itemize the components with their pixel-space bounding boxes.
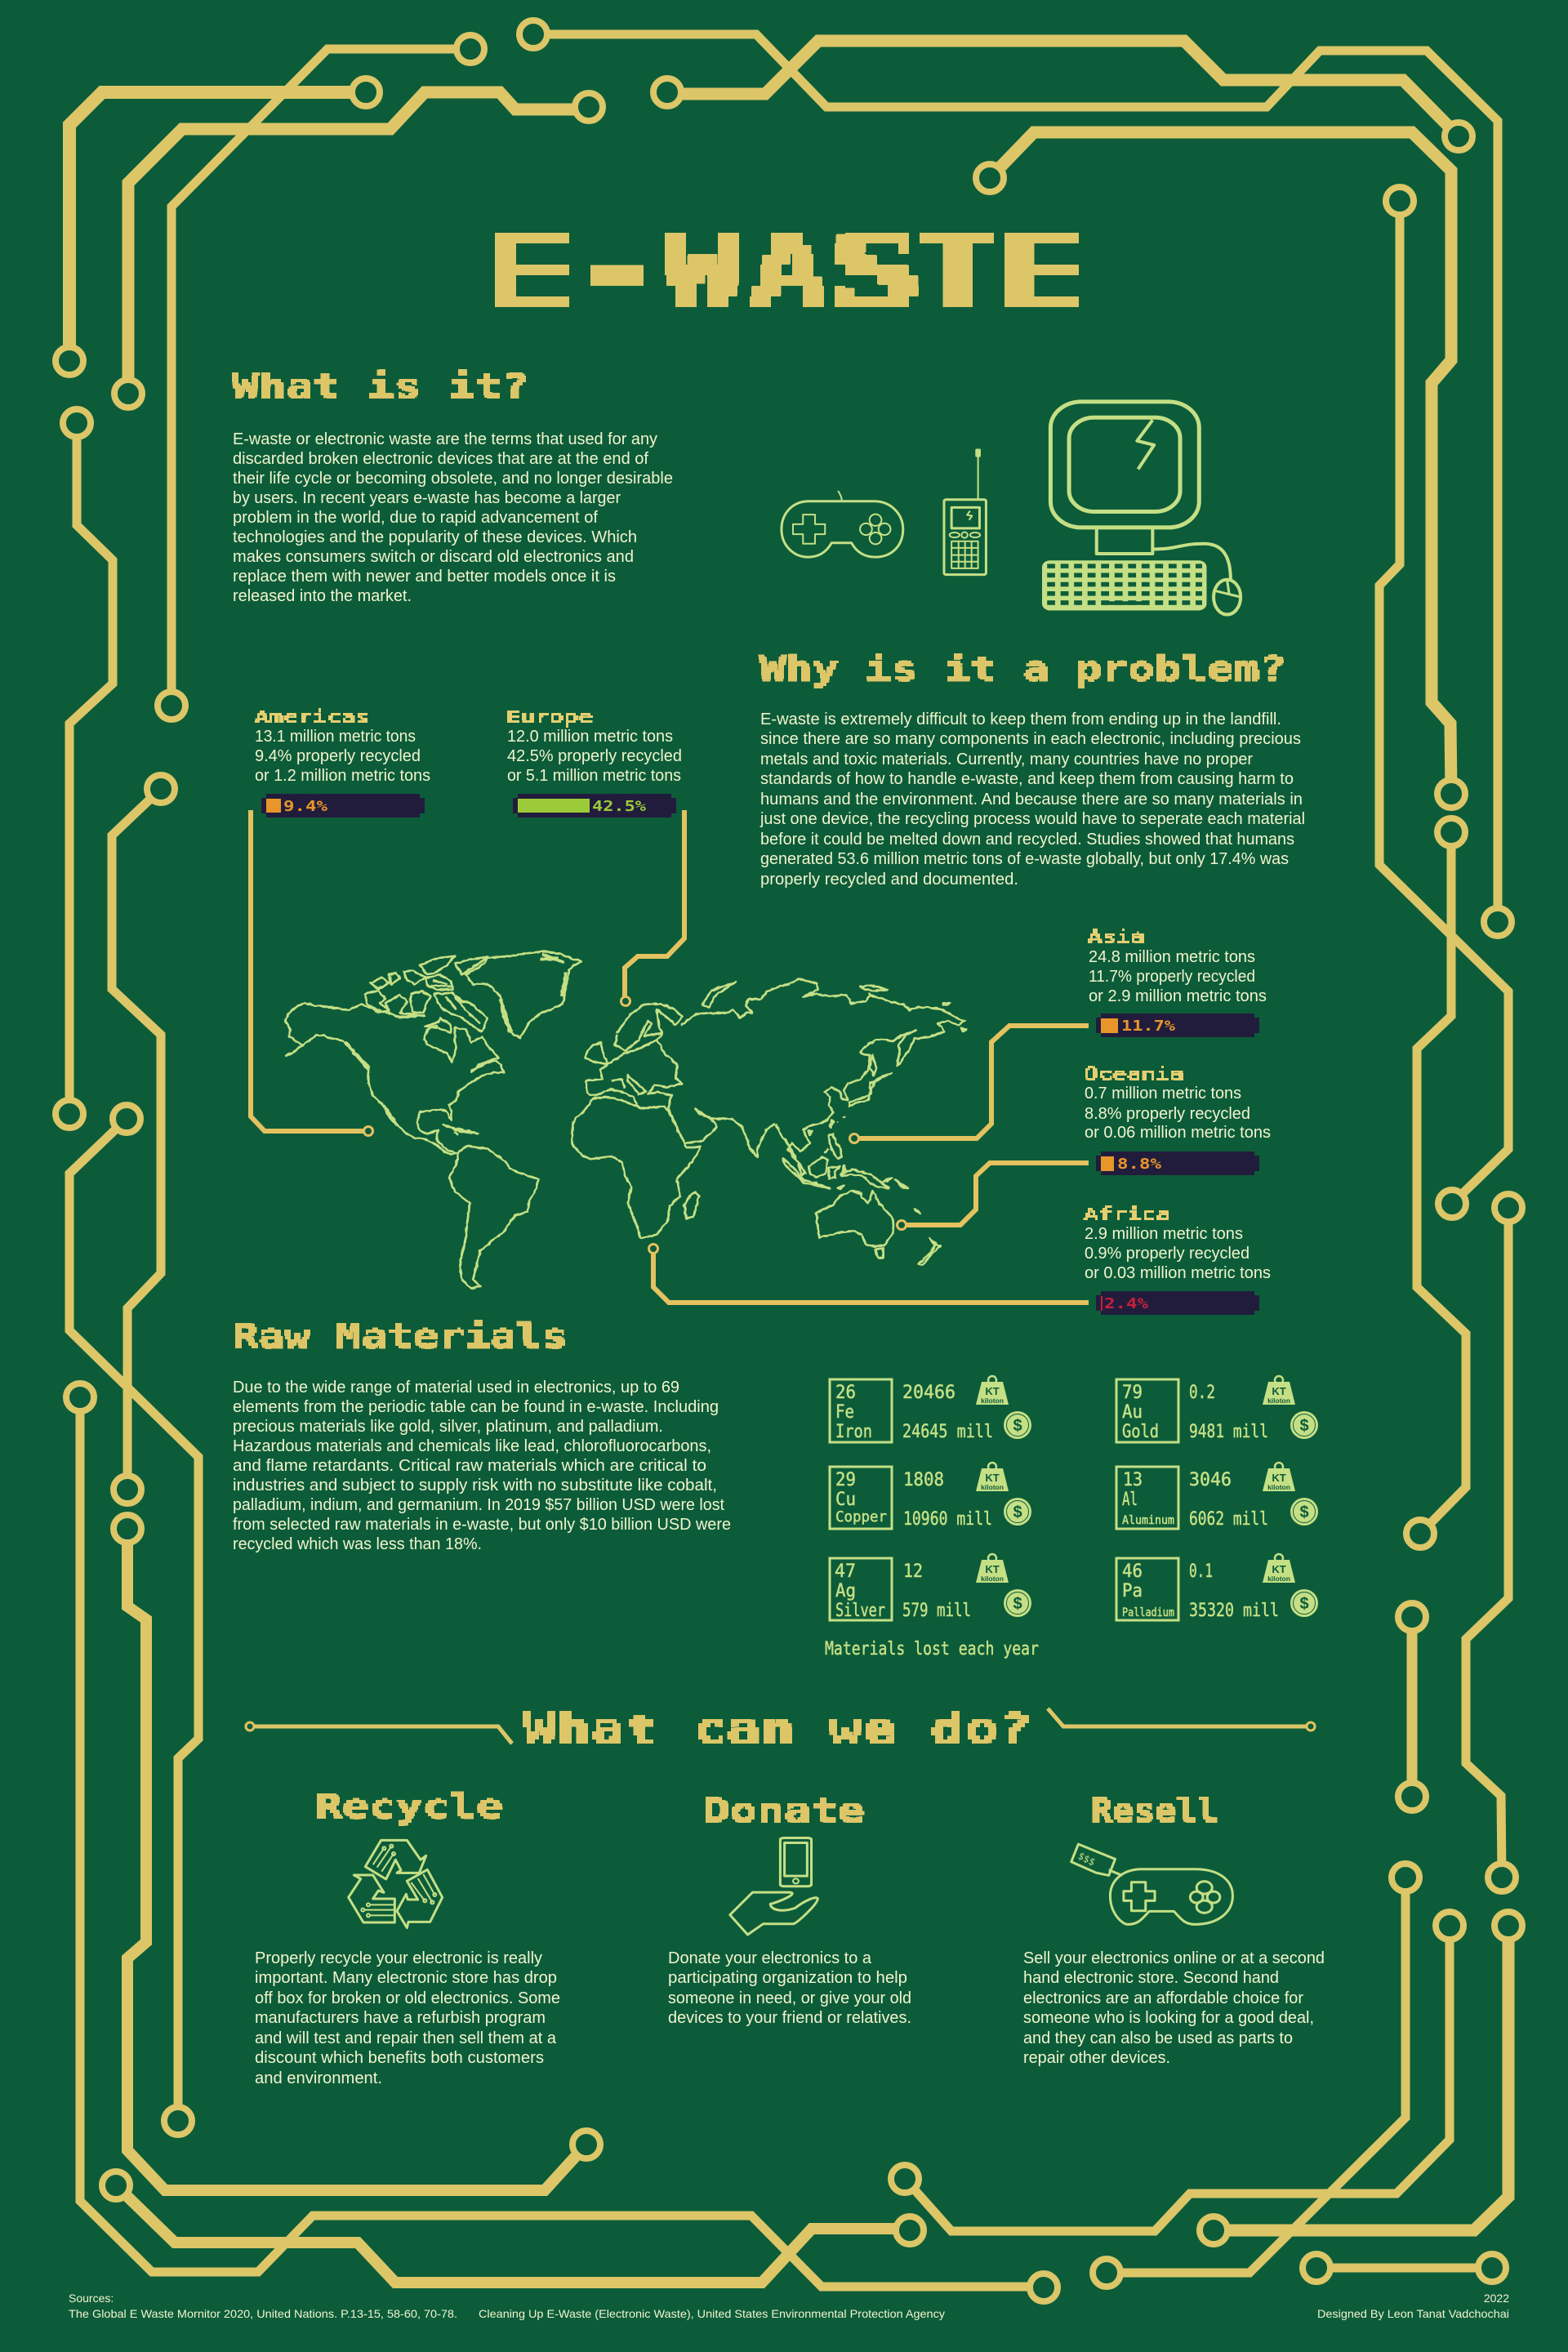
material: copper: KT (985, 1472, 1000, 1484)
text block: what is it: by users. In recent years e-waste has become a larger (233, 489, 621, 507)
callout: Oceania (897, 1064, 1271, 1230)
callout: Europe: or 5.1 million metric tons (507, 767, 681, 785)
text block: resell: repair other devices. (1023, 2049, 1170, 2067)
material: silver: KT (985, 1563, 1000, 1575)
material: iron (830, 1376, 1031, 1442)
text block: what is it: their life cycle or becoming obsolete, and no longer desirable (233, 470, 673, 488)
callout: Europe (506, 707, 684, 1006)
material: palladium: Pa (1122, 1581, 1143, 1601)
heading: donate: Donate (703, 1791, 865, 1830)
text block: recycle: manufacturers have a refurbish program (255, 2009, 546, 2027)
material: copper: Cu (835, 1490, 856, 1510)
text block: raw materials: palladium, indium, and germanium. In 2019 $57 billion USD were lost (233, 1496, 724, 1514)
title: - (573, 213, 663, 332)
callout: Asia: 24.8 million metric tons (1089, 948, 1255, 966)
material: aluminum: kiloton (1267, 1483, 1290, 1491)
text block: what is it: replace them with newer and better models once it is (233, 568, 616, 586)
text block: what is it: technologies and the popularity of these devices. Which (233, 528, 637, 546)
material: iron: 20466 (902, 1383, 956, 1403)
material: iron: kiloton (981, 1396, 1004, 1405)
text block: why is it a problem: generated 53.6 million metric tons of e-waste globally, but only 17.4% was (760, 850, 1289, 868)
text block: raw materials: recycled which was less than 18%. (233, 1535, 482, 1553)
material: copper: 1808 (903, 1470, 944, 1490)
material: palladium (1116, 1554, 1318, 1621)
material: palladium: Palladium (1122, 1606, 1174, 1619)
material: aluminum: $ (1299, 1503, 1309, 1521)
text block: why is it a problem: E-waste is extremely difficult to keep them from ending up in the landfill. (760, 710, 1281, 728)
material: palladium: KT (1272, 1563, 1286, 1575)
material: palladium: kiloton (1267, 1575, 1290, 1583)
heading: recycle: Recycle (315, 1787, 503, 1826)
title: E (480, 213, 581, 332)
text block: what is it: problem in the world, due to rapid advancement of (233, 509, 598, 527)
title: A (750, 213, 827, 332)
heading: why is it a problem: Why is it a problem? (760, 649, 1286, 688)
text block: why is it a problem: properly recycled and documented. (760, 871, 1018, 889)
world map (285, 951, 966, 1289)
callout: Oceania: 8.8% (1117, 1156, 1161, 1173)
material: aluminum: 3046 (1189, 1470, 1232, 1490)
material: aluminum: KT (1272, 1472, 1286, 1484)
text block: donate (668, 1949, 911, 2027)
callout: Oceania: or 0.06 million metric tons (1085, 1124, 1271, 1142)
text block: raw materials: from selected raw materials in e-waste, but only $10 billion USD were (233, 1516, 731, 1534)
material: copper (830, 1463, 1031, 1530)
text block: recycle: discount which benefits both customers (255, 2049, 544, 2067)
icon: phone over hand (730, 1838, 817, 1935)
callout: Americas: 9.4% properly recycled (255, 747, 421, 765)
text block: recycle: Properly recycle your electronic is really (255, 1949, 542, 1967)
text block: what is it: released into the market. (233, 587, 412, 605)
icon: controller with price tag: $$$ (1076, 1850, 1097, 1869)
material: iron: $ (1013, 1417, 1022, 1435)
text block: resell: and they can also be used as parts to (1023, 2029, 1293, 2047)
title (480, 213, 1091, 332)
material: aluminum (1116, 1463, 1318, 1530)
material: gold (1116, 1376, 1318, 1442)
callout: Africa: 2.9 million metric tons (1085, 1225, 1243, 1243)
text block: raw materials (233, 1379, 731, 1553)
callout: Europe: 42.5% properly recycled (507, 747, 682, 765)
title: E (991, 213, 1091, 332)
title: T (918, 213, 998, 332)
footer: sources: Cleaning Up E-Waste (Electronic Waste), United States Environmental Protection Agency (479, 2307, 945, 2320)
footer: sources: Sources: (69, 2292, 114, 2305)
material: palladium: $ (1299, 1595, 1309, 1613)
material: iron: Fe (835, 1402, 854, 1423)
text block: resell: someone who is looking for a good deal, (1023, 2009, 1314, 2027)
material: silver: 579 mill (902, 1601, 971, 1621)
material: gold: KT (1272, 1385, 1286, 1397)
text block: why is it a problem: metals and toxic materials. Currently, many countries have no proper (760, 751, 1253, 768)
text block: resell: electronics are an affordable choice for (1023, 1989, 1303, 2007)
text block: donate: someone in need, or give your old (668, 1989, 911, 2007)
material: copper: 29 (835, 1470, 856, 1490)
material: gold: 0.2 (1189, 1383, 1215, 1403)
material: copper: $ (1013, 1503, 1022, 1521)
text block: raw materials: elements from the periodic table can be found in e-waste. Including (233, 1398, 719, 1416)
callout: Europe: Europe (506, 707, 593, 727)
icon: controller with price tag (1071, 1844, 1232, 1924)
callout: Americas: 9.4% (283, 798, 327, 815)
text block: resell: hand electronic store. Second hand (1023, 1969, 1279, 1987)
text block: donate: Donate your electronics to a (668, 1949, 872, 1967)
material: silver: 12 (903, 1561, 923, 1582)
material: palladium: 0.1 (1189, 1561, 1213, 1582)
material: copper: kiloton (981, 1483, 1004, 1491)
text block: what is it: E-waste or electronic waste are the terms that used for any (233, 430, 657, 448)
caption: materials lost: Materials lost each year (825, 1639, 1039, 1659)
callout: Oceania: 0.7 million metric tons (1085, 1085, 1241, 1102)
text block: why is it a problem: before it could be melted down and recycled. Studies showed that humans (760, 831, 1294, 849)
text block: recycle: off box for broken or old electronics. Some (255, 1989, 560, 2007)
text block: recycle: important. Many electronic store has drop (255, 1969, 557, 1987)
text block: recycle: and will test and repair then sell them at a (255, 2029, 557, 2047)
icon: game controller (782, 491, 903, 557)
callout: Asia: Asia (1088, 927, 1145, 947)
material: copper: 10960 mill (903, 1509, 992, 1530)
text block: raw materials: industries and subject to supply risk with no substitute like cobalt, (233, 1477, 717, 1494)
material: aluminum: 13 (1123, 1470, 1143, 1490)
text block: raw materials: Hazardous materials and chemicals like lead, chlorofluorocarbons, (233, 1437, 711, 1455)
heading: raw materials: Raw Materials (233, 1316, 568, 1356)
icon: broken computer (1042, 402, 1241, 615)
title: S (825, 213, 923, 332)
material: silver: kiloton (981, 1575, 1004, 1583)
text block: why is it a problem: standards of how to handle e-waste, and keep them from causing harm to (760, 770, 1294, 788)
material: iron: KT (985, 1385, 1000, 1397)
callout: Asia: 11.7% properly recycled (1089, 968, 1255, 986)
icon: recycle arrows (349, 1840, 443, 1928)
footer: sources: The Global E Waste Mornitor 2020, United Nations. P.13-15, 58-60, 70-78. (69, 2307, 457, 2320)
callout: Africa: 2.4% (1104, 1295, 1148, 1312)
material: copper: Copper (835, 1508, 887, 1526)
title: W (665, 213, 741, 332)
panel: resell (1023, 1791, 1325, 2067)
material: palladium: 35320 mill (1189, 1601, 1279, 1621)
callout: Africa (648, 1205, 1271, 1315)
heading: resell: Resell (1091, 1791, 1218, 1830)
callout: Americas: Americas (255, 707, 370, 727)
material: silver: Silver (835, 1601, 885, 1621)
text block: raw materials: and flame retardants. Critical raw materials which are critical to (233, 1457, 706, 1475)
footer: credit: 2022 (1484, 2292, 1509, 2305)
text block: what is it: discarded broken electronic devices that are at the end of (233, 450, 648, 468)
material: silver: 47 (835, 1561, 856, 1582)
text block: why is it a problem: just one device, the recycling process would have to seperate each material (760, 810, 1305, 828)
heading: what can we do: What can we do? (523, 1705, 1032, 1753)
material: palladium: 46 (1122, 1561, 1143, 1582)
text block: raw materials: Due to the wide range of material used in electronics, up to 69 (233, 1379, 679, 1396)
text block: why is it a problem: since there are so many components in each electronic, including precious (760, 730, 1301, 748)
text block: what is it: makes consumers switch or discard old electronics and (233, 548, 634, 566)
material: aluminum: Al (1122, 1490, 1138, 1510)
text block: recycle (255, 1949, 560, 2087)
material: gold: 9481 mill (1189, 1422, 1268, 1442)
material: gold: $ (1299, 1417, 1309, 1435)
text block: donate: participating organization to help (668, 1969, 907, 1987)
icon: cell phone (944, 450, 986, 575)
callout: Americas (251, 707, 430, 1135)
material: aluminum: 6062 mill (1189, 1509, 1268, 1530)
material: iron: Iron (835, 1422, 872, 1442)
panel: recycle (255, 1787, 560, 2087)
text block: why is it a problem: humans and the environment. And because there are so many materials in (760, 791, 1303, 808)
callout: Oceania: Oceania (1084, 1064, 1184, 1084)
heading: what can we do (246, 1705, 1315, 1753)
callout: Asia: or 2.9 million metric tons (1089, 987, 1267, 1005)
text block: recycle: and environment. (255, 2069, 382, 2087)
footer: credit: Designed By Leon Tanat Vadchochai (1317, 2307, 1509, 2320)
callout: Asia: 11.7% (1121, 1018, 1175, 1035)
material: gold: Gold (1122, 1422, 1159, 1442)
heading: what is it: What is it? (232, 367, 529, 406)
material: silver: Ag (835, 1581, 856, 1601)
material: gold: Au (1122, 1402, 1143, 1423)
footer: sources (69, 2292, 945, 2320)
material: gold: kiloton (1267, 1396, 1290, 1405)
material: silver (830, 1554, 1031, 1621)
callout: Europe: 12.0 million metric tons (507, 728, 673, 746)
material: iron: 26 (835, 1383, 856, 1403)
material: gold: 79 (1122, 1383, 1143, 1403)
callout: Americas: 13.1 million metric tons (255, 728, 416, 746)
footer: credit (1317, 2292, 1509, 2320)
material: iron: 24645 mill (902, 1422, 993, 1442)
material: silver: $ (1013, 1595, 1022, 1613)
callout: Americas: or 1.2 million metric tons (255, 767, 430, 785)
callout: Africa: or 0.03 million metric tons (1085, 1264, 1271, 1282)
text block: why is it a problem (760, 710, 1305, 889)
text block: resell (1023, 1949, 1325, 2067)
text block: donate: devices to your friend or relatives. (668, 2009, 911, 2027)
callout: Oceania: 8.8% properly recycled (1085, 1105, 1250, 1123)
text block: what is it (233, 430, 673, 605)
text block: resell: Sell your electronics online or at a second (1023, 1949, 1325, 1967)
callout: Asia (849, 927, 1267, 1143)
callout: Africa: 0.9% properly recycled (1085, 1245, 1250, 1263)
material: aluminum: Aluminum (1122, 1514, 1174, 1527)
panel: donate (668, 1791, 911, 2027)
callout: Africa: Africa (1084, 1205, 1170, 1224)
callout: Europe: 42.5% (592, 798, 646, 815)
text block: raw materials: precious materials like gold, silver, platinum, and palladium. (233, 1418, 663, 1436)
